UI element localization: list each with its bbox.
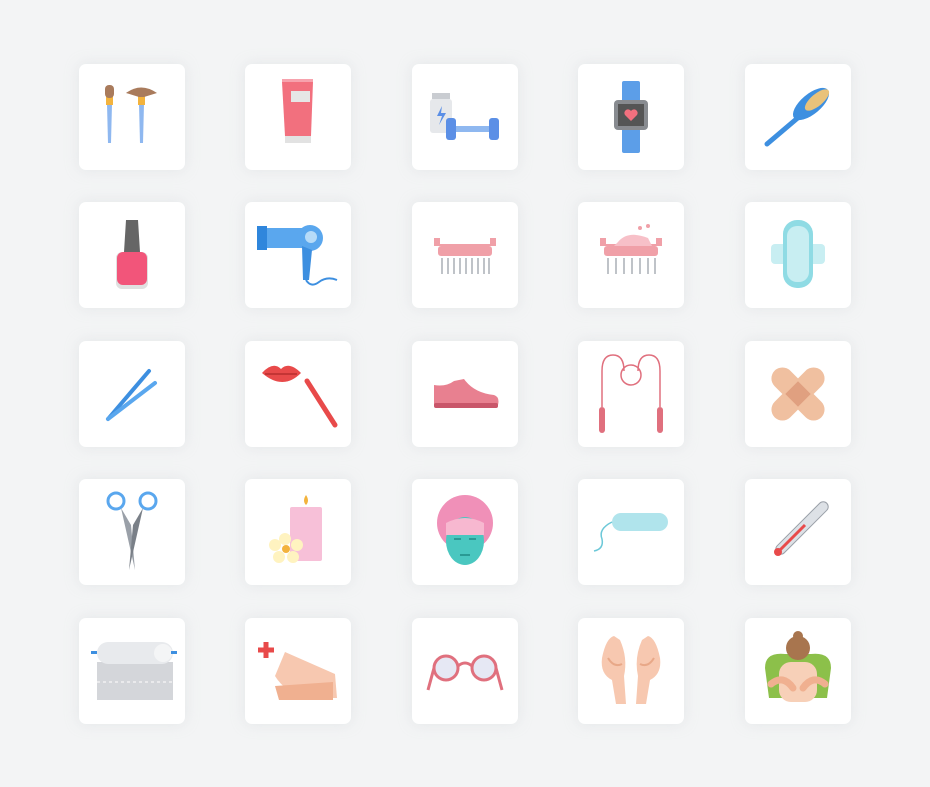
card: nail polish <box>79 202 185 308</box>
card: face mask towel <box>412 479 518 585</box>
card: tweezers <box>79 341 185 447</box>
card: supplements and dumbbell <box>412 64 518 170</box>
card: jump rope <box>578 341 684 447</box>
card: glasses <box>412 618 518 724</box>
card: thermometer <box>745 479 851 585</box>
card: lips and lip liner <box>245 341 351 447</box>
card: sneaker <box>412 341 518 447</box>
card: hair dryer <box>245 202 351 308</box>
card: sanitary pad <box>745 202 851 308</box>
card: massaging hands <box>578 618 684 724</box>
card: cream tube <box>245 64 351 170</box>
card: paper towel roll <box>79 618 185 724</box>
card: foamy scrub brush <box>578 202 684 308</box>
card: scrub brush <box>412 202 518 308</box>
card: back massage <box>745 618 851 724</box>
card: scissors <box>79 479 185 585</box>
card: makeup brushes <box>79 64 185 170</box>
card: smartwatch <box>578 64 684 170</box>
card: tampon <box>578 479 684 585</box>
card: bandages <box>745 341 851 447</box>
card: hand washing with cross <box>245 618 351 724</box>
card: bath brush <box>745 64 851 170</box>
card: candle and flower <box>245 479 351 585</box>
